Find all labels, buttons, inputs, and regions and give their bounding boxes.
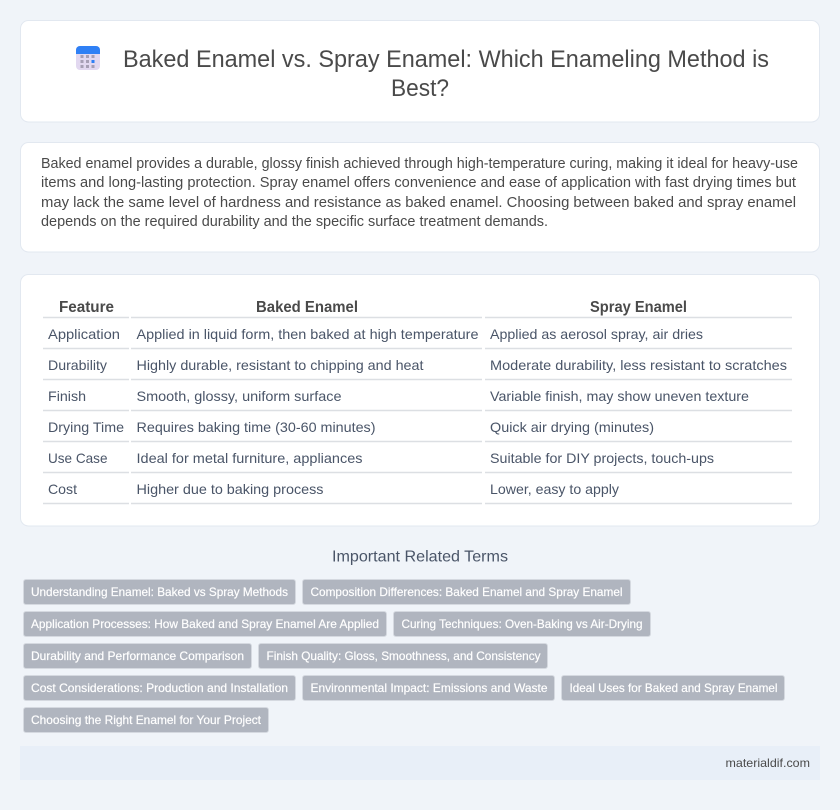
table header row bbox=[59, 299, 687, 316]
row: drying time: Quick air drying (minutes) bbox=[490, 419, 654, 435]
row: application: Application bbox=[48, 326, 120, 342]
row: drying time bbox=[48, 419, 654, 435]
tag group: related terms: Composition Differences: Baked Enamel and Spray Enamel bbox=[310, 585, 622, 599]
tag group: related terms: Durability and Performance Comparison bbox=[31, 649, 244, 663]
tag group: related terms bbox=[24, 580, 784, 732]
tag group: related terms: Understanding Enamel: Baked vs Spray Methods bbox=[31, 585, 288, 599]
table header row: Baked Enamel bbox=[256, 299, 358, 316]
row: durability bbox=[48, 357, 787, 373]
row: cost: Lower, easy to apply bbox=[490, 481, 619, 497]
table header row: Feature bbox=[59, 299, 114, 316]
footer: materialdif.com bbox=[726, 756, 810, 770]
row: durability: Durability bbox=[48, 357, 107, 373]
tag group: related terms: Curing Techniques: Oven-Baking vs Air-Drying bbox=[402, 617, 642, 631]
row: application: Applied in liquid form, then baked at high temperature bbox=[136, 326, 479, 342]
description text: depends on the required durability and the specific surface treatment demands. bbox=[41, 214, 548, 230]
row: use case: Suitable for DIY projects, touch-ups bbox=[490, 450, 714, 466]
tag group: related terms: Environmental Impact: Emissions and Waste bbox=[310, 681, 548, 695]
description text: Baked enamel provides a durable, glossy finish achieved through high-temperature curing, making it ideal for heavy-use bbox=[41, 156, 798, 172]
row: drying time: Requires baking time (30-60 minutes) bbox=[136, 419, 376, 435]
row: cost bbox=[48, 481, 619, 497]
panel: description bbox=[20, 142, 820, 252]
heading: related terms: Important Related Terms bbox=[332, 548, 508, 566]
row: drying time: Drying Time bbox=[48, 419, 124, 435]
description text: may lack the same level of hardness and resistance as baked enamel. Choosing between baked and spray enamel bbox=[41, 195, 796, 211]
row: use case: Ideal for metal furniture, appliances bbox=[136, 450, 362, 466]
row: durability: Moderate durability, less resistant to scratches bbox=[490, 357, 787, 373]
row: use case: Use Case bbox=[48, 450, 108, 466]
row: durability: Highly durable, resistant to chipping and heat bbox=[136, 357, 424, 373]
row: finish: Smooth, glossy, uniform surface bbox=[136, 388, 342, 404]
row: cost: Cost bbox=[48, 481, 77, 497]
panel: title header bbox=[20, 20, 820, 122]
icon: calendar bbox=[76, 46, 100, 70]
panel: title header: Best? bbox=[391, 75, 449, 102]
tag group: related terms: Choosing the Right Enamel for Your Project bbox=[31, 713, 262, 727]
row: application: Applied as aerosol spray, air dries bbox=[490, 326, 703, 342]
tag group: related terms: Application Processes: How Baked and Spray Enamel Are Applied bbox=[31, 617, 379, 631]
footer bbox=[20, 746, 820, 780]
table header row: Spray Enamel bbox=[590, 299, 687, 316]
row: use case bbox=[48, 450, 714, 466]
row: finish: Variable finish, may show uneven texture bbox=[490, 388, 749, 404]
row: finish: Finish bbox=[48, 388, 86, 404]
row: cost: Higher due to baking process bbox=[136, 481, 324, 497]
tag group: related terms: Finish Quality: Gloss, Smoothness, and Consistency bbox=[266, 649, 540, 663]
row: finish bbox=[48, 388, 749, 404]
tag group: related terms: Ideal Uses for Baked and Spray Enamel bbox=[570, 681, 778, 695]
tag group: related terms: Cost Considerations: Production and Installation bbox=[31, 681, 288, 695]
panel: comparison table bbox=[20, 274, 820, 526]
row: application bbox=[48, 326, 703, 342]
description text: items and long-lasting protection. Spray enamel offers convenience and ease of application with fast drying times but bbox=[41, 175, 796, 191]
title: Baked Enamel vs. Spray Enamel: Which Enameling Method is bbox=[123, 46, 769, 73]
